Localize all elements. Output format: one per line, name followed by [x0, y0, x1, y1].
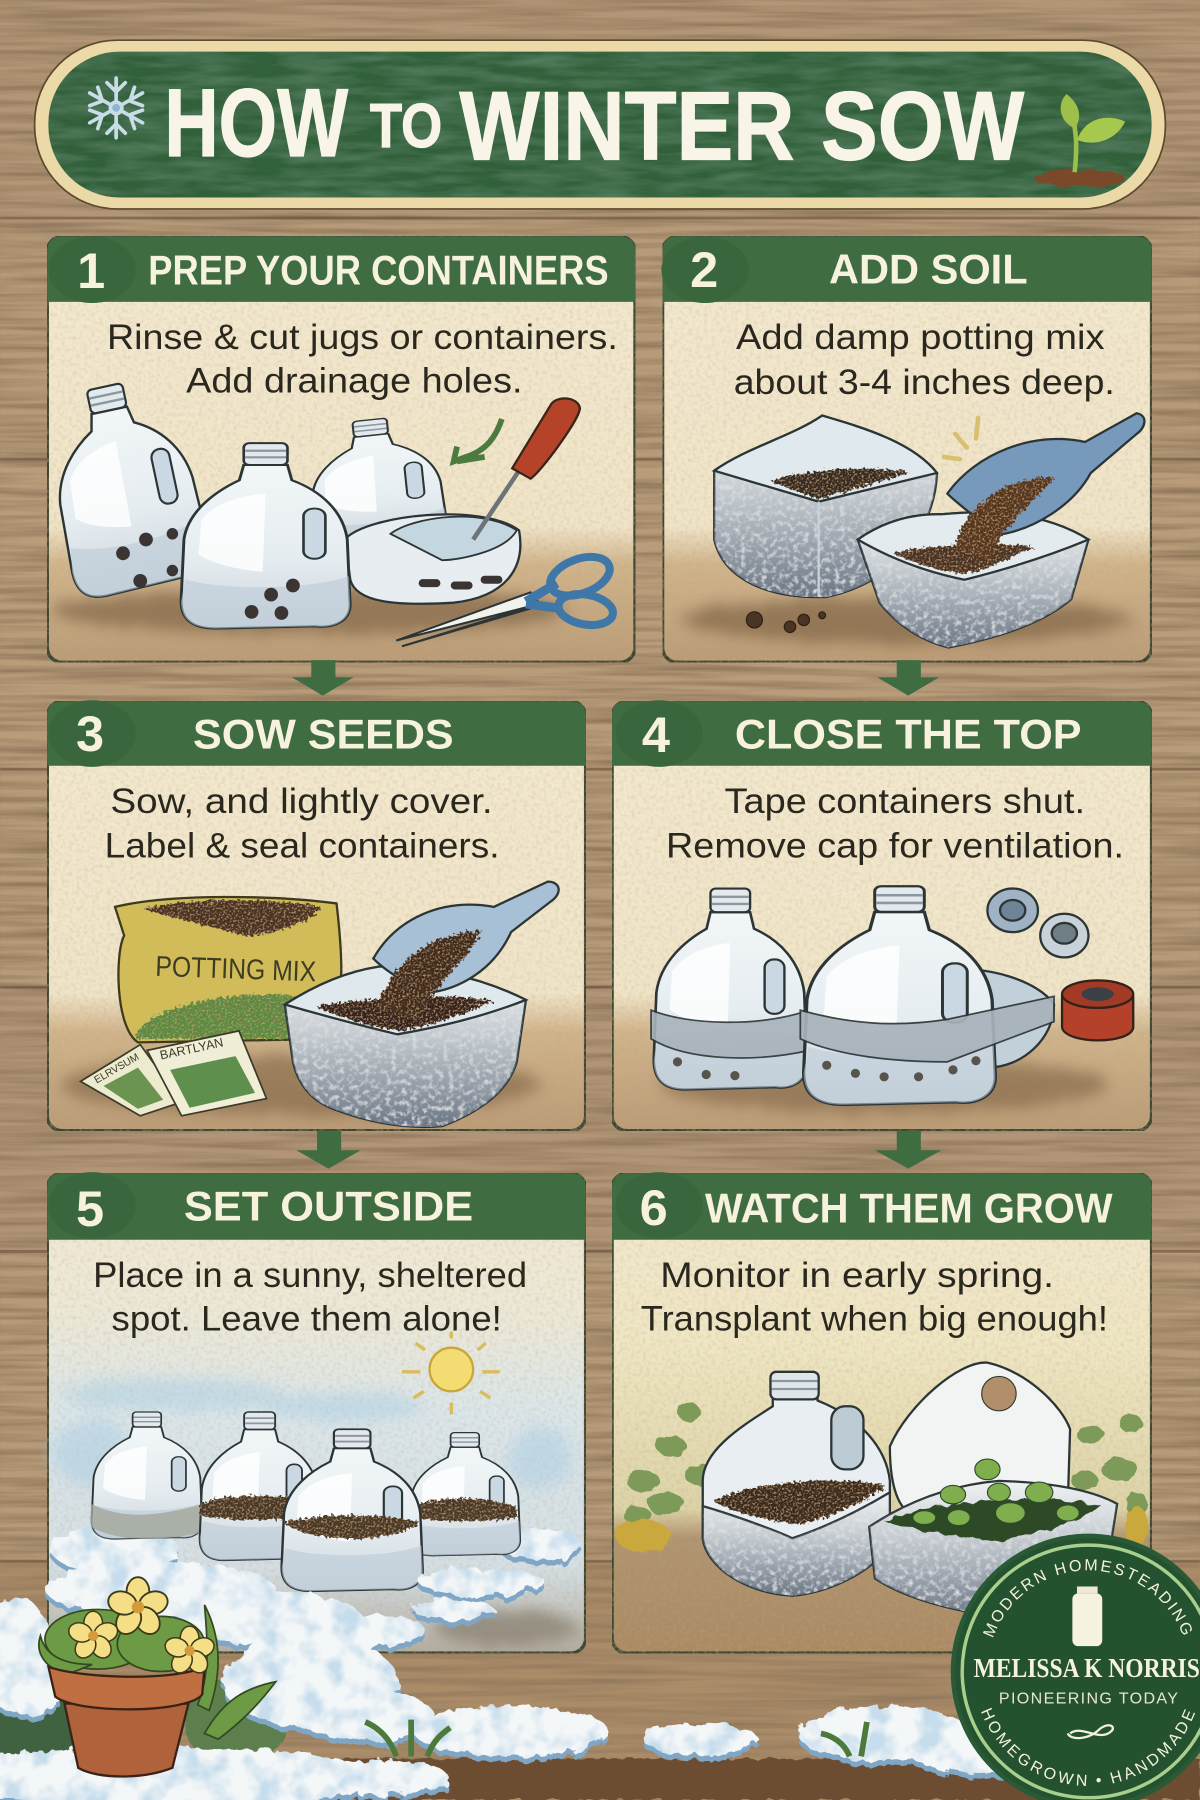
icon: mason jar — [1072, 1586, 1102, 1646]
header 3: SOW SEEDS — [193, 711, 454, 757]
snow drifts panel 5 — [46, 1562, 545, 1647]
back tub — [714, 416, 937, 597]
title text: TO — [370, 92, 442, 161]
cut bowl — [345, 514, 520, 604]
body text 5: spot. Leave them alone! — [112, 1298, 502, 1338]
arrow 2 to 4 — [877, 660, 939, 696]
ground smudge 4 — [660, 1057, 1108, 1112]
header 5: 5 — [76, 1180, 104, 1237]
front tub — [858, 512, 1088, 647]
title text: HOW — [164, 70, 348, 177]
header 4: CLOSE THE TOP — [735, 711, 1082, 757]
body text 3: Label & seal containers. — [105, 826, 500, 866]
ground smudge 2 — [683, 597, 1131, 643]
roll of red tape — [1062, 980, 1133, 1040]
snow mounds — [0, 1596, 1068, 1800]
seed packets: BARTLYAN — [159, 1035, 225, 1063]
bottle caps — [987, 889, 1088, 957]
bottom snow and soil — [0, 1596, 1200, 1800]
icon: scissors — [396, 549, 615, 646]
spark marks — [944, 418, 978, 459]
header 2: ADD SOIL — [829, 247, 1028, 293]
terracotta pot with flowers — [39, 1577, 276, 1776]
ground smudge 3 — [58, 1055, 540, 1115]
bowl behind — [942, 969, 1054, 1068]
header 1: 1 — [77, 242, 105, 299]
title text — [164, 70, 1024, 181]
body text 3 — [105, 781, 500, 866]
arrow 1 to 3 — [292, 660, 354, 696]
header 1: PREP YOUR CONTAINERS — [148, 248, 609, 294]
body text 1: Rinse & cut jugs or containers. — [107, 317, 618, 357]
body text 4: Tape containers shut. — [725, 781, 1085, 821]
body text 1: Add drainage holes. — [186, 361, 523, 401]
body text 2: about 3-4 inches deep. — [734, 362, 1115, 402]
badge: Melissa K Norris — [950, 1534, 1200, 1800]
jug top lid — [890, 1363, 1070, 1515]
badge arc text bottom: HOMEGROWN • HANDMADE — [981, 1708, 1196, 1786]
panel 5: set outside — [46, 1172, 586, 1653]
icon: seedling — [1033, 94, 1125, 187]
jug with holes front — [181, 443, 350, 629]
body text 4: Remove cap for ventilation. — [666, 826, 1124, 866]
body text 5 — [93, 1255, 527, 1338]
open jug with soil — [703, 1372, 890, 1596]
header 6: WATCH THEM GROW — [705, 1186, 1113, 1232]
soil clods — [746, 612, 826, 633]
panel 2: add soil — [661, 236, 1152, 662]
taped jug left — [651, 889, 810, 1090]
jug behind right — [303, 413, 450, 559]
icon: screwdriver — [473, 398, 580, 540]
leaves — [39, 1605, 276, 1739]
icon: snowflake — [90, 78, 143, 138]
header 6 — [612, 1172, 1152, 1240]
body text 6: Monitor in early spring. — [660, 1255, 1054, 1295]
body text 4 — [666, 781, 1124, 866]
flowers — [66, 1577, 217, 1677]
header 3: 3 — [76, 705, 104, 762]
panel 4: close the top — [612, 700, 1152, 1131]
body text 2: Add damp potting mix — [736, 317, 1105, 357]
tub with soil — [285, 967, 526, 1127]
header 2 — [661, 236, 1152, 303]
bag of potting mix: POTTING MIX — [155, 951, 317, 988]
snow behind jugs — [52, 1524, 580, 1575]
taped jug right — [800, 886, 1054, 1105]
scoop with soil — [947, 413, 1144, 562]
body text 5: Place in a sunny, sheltered — [93, 1255, 527, 1295]
header 4 — [612, 700, 1152, 767]
panel 1: prep your containers — [36, 236, 635, 662]
header 5 — [47, 1172, 586, 1240]
badge arc text top: MODERN HOMESTEADING — [983, 1559, 1192, 1638]
tub with seedlings — [869, 1459, 1117, 1619]
header 3 — [47, 700, 586, 767]
icon: grass sprouts — [365, 1720, 867, 1756]
seed packets — [81, 1031, 267, 1116]
title text: SOW — [821, 72, 1024, 181]
background shrubs — [615, 1403, 1148, 1552]
body text 2 — [734, 317, 1115, 402]
badge subtitle: PIONEERING TODAY — [999, 1690, 1179, 1708]
row of sealed jugs — [91, 1412, 520, 1591]
body text 6 — [641, 1255, 1108, 1338]
title text: WINTER — [459, 72, 795, 181]
header 2: 2 — [690, 241, 718, 298]
panel 3: sow seeds — [47, 700, 586, 1131]
header 5: SET OUTSIDE — [184, 1183, 473, 1229]
icon: infinity flourish — [1068, 1725, 1113, 1738]
scoop pouring soil — [373, 882, 559, 1022]
lid opening — [982, 1376, 1016, 1411]
header 1 — [47, 236, 635, 303]
ground smudge 1 — [52, 588, 568, 634]
seed packets: ELRVSUM — [93, 1052, 141, 1086]
jug with holes left — [36, 372, 215, 602]
bag of potting mix — [115, 897, 341, 1042]
clouds — [52, 1379, 572, 1490]
icon: sun — [402, 1332, 500, 1414]
title banner — [35, 40, 1165, 209]
header 4: 4 — [642, 706, 670, 763]
pot — [48, 1667, 205, 1776]
body text 3: Sow, and lightly cover. — [110, 781, 493, 821]
arrow 3 to 5 — [296, 1131, 361, 1169]
arrow 4 to 6 — [875, 1131, 942, 1169]
dirt patch — [434, 1609, 576, 1646]
foliage behind pot — [0, 1678, 287, 1774]
panel 6: watch them grow — [612, 1172, 1152, 1653]
header 6: 6 — [640, 1179, 668, 1236]
body text 6: Transplant when big enough! — [641, 1298, 1108, 1338]
body text 1 — [107, 317, 618, 401]
arrow: small green — [454, 419, 502, 461]
